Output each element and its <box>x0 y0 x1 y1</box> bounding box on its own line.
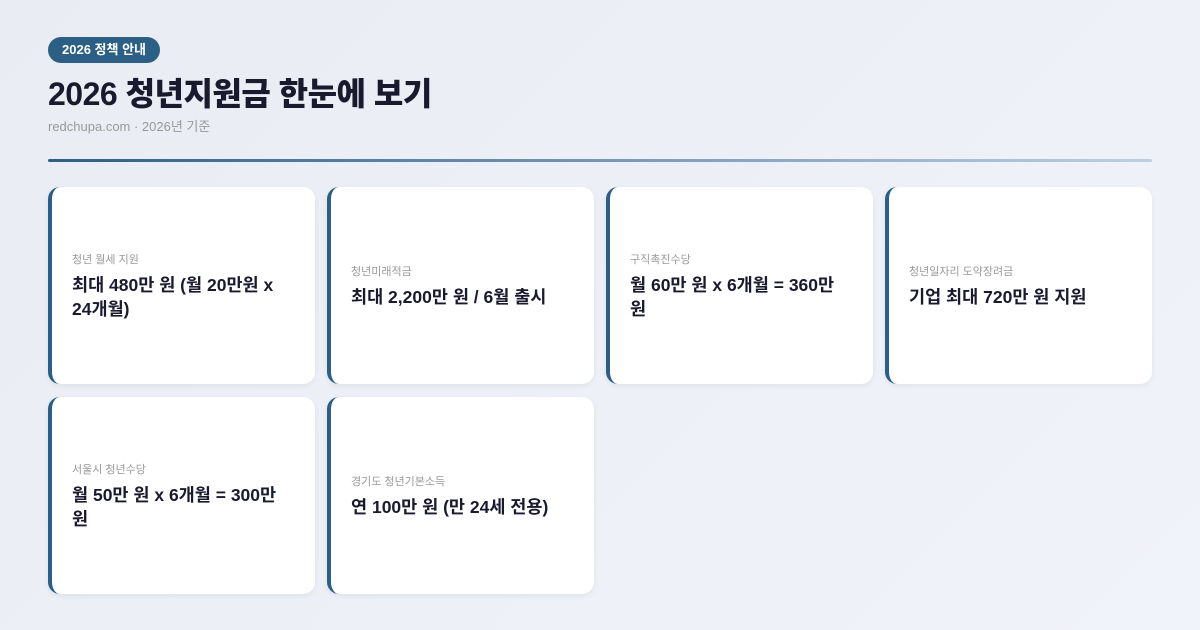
card: 청년 월세 지원: 24개월) <box>72 298 130 318</box>
card: 서울시 청년수당 <box>48 397 315 594</box>
card: 청년미래적금: 최대 2,200만 원 / 6월 출시 <box>351 286 546 306</box>
card: 구직촉진수당: 월 60만 원 x 6개월 = 360만 <box>630 274 834 294</box>
badge <box>48 37 160 63</box>
card: 청년일자리 도약장려금 <box>885 187 1152 384</box>
card: 구직촉진수당: 구직촉진수당 <box>630 254 691 266</box>
card: 청년 월세 지원: 청년 월세 지원 <box>72 254 139 266</box>
badge: 2026 정책 안내 <box>62 42 146 57</box>
title: 2026 청년지원금 한눈에 보기 <box>48 76 432 112</box>
card: 청년일자리 도약장려금: 기업 최대 720만 원 지원 <box>909 286 1086 306</box>
card: 청년 월세 지원 <box>48 187 315 384</box>
card: 서울시 청년수당: 원 <box>72 508 88 528</box>
card: 청년미래적금: 청년미래적금 <box>351 266 412 278</box>
card: 청년일자리 도약장려금: 청년일자리 도약장려금 <box>909 266 1013 278</box>
card: 서울시 청년수당: 월 50만 원 x 6개월 = 300만 <box>72 484 276 504</box>
card: 청년 월세 지원: 최대 480만 원 (월 20만원 x <box>72 274 273 294</box>
subtitle: redchupa.com · 2026년 기준 <box>48 119 210 134</box>
card: 경기도 청년기본소득 <box>327 397 594 594</box>
card: 경기도 청년기본소득: 경기도 청년기본소득 <box>351 476 445 488</box>
card: 서울시 청년수당: 서울시 청년수당 <box>72 464 146 476</box>
card: 경기도 청년기본소득: 연 100만 원 (만 24세 전용) <box>351 496 548 516</box>
card: 청년미래적금 <box>327 187 594 384</box>
card: 구직촉진수당: 원 <box>630 298 646 318</box>
card: 구직촉진수당 <box>606 187 873 384</box>
